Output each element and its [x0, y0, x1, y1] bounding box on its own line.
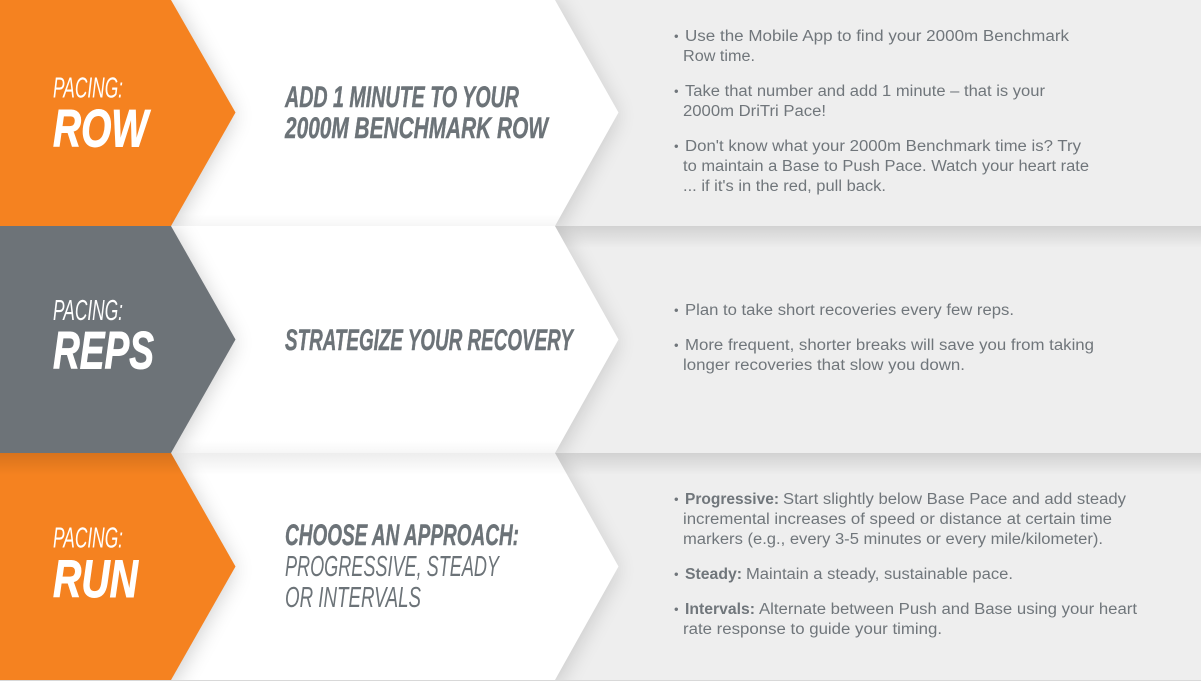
label: pacing run: PACING: [53, 522, 123, 554]
text block: run tips: rate response to guide your timing. [683, 621, 942, 638]
text block: run tips: incremental increases of speed or distance at certain time [683, 511, 1112, 528]
orange chevron [0, 453, 236, 680]
heading: choose an approach: PROGRESSIVE, STEADY [285, 551, 501, 583]
label: pacing reps: PACING: [53, 295, 123, 327]
bottom edge [0, 680, 1201, 681]
label: pacing run: RUN [53, 550, 139, 609]
white chevron [171, 0, 618, 226]
white chevron shadow [555, 453, 622, 680]
text block: row tips [674, 28, 1089, 195]
orange chevron shadow [171, 453, 240, 680]
heading: choose an approach [286, 524, 518, 608]
text block: run tips: Intervals: [685, 601, 755, 618]
text block: reps tips: More frequent, shorter breaks will save you from taking [685, 337, 1094, 354]
heading: add 1 minute: 2000M BENCHMARK ROW [284, 112, 550, 145]
text block: row tips: • [674, 138, 679, 154]
label: pacing row: ROW [53, 100, 151, 158]
text block: run tips: Maintain a steady, sustainable pace. [746, 566, 1013, 583]
white chevron [171, 226, 618, 453]
heading: add 1 minute [284, 86, 550, 138]
text block: row tips: • [674, 28, 679, 44]
orange chevron [0, 0, 236, 226]
label: pacing row: PACING: [53, 72, 123, 104]
grey chevron shadow [171, 226, 240, 453]
label: pacing reps: REPS [53, 322, 154, 380]
top shadow on white [171, 453, 561, 464]
text block: row tips: Use the Mobile App to find your 2000m Benchmark [685, 28, 1069, 45]
text block: row tips: Don't know what your 2000m Benchmark time is? Try [685, 138, 1081, 155]
top shadow on orange [0, 453, 180, 468]
heading: choose an approach: CHOOSE AN APPROACH: [285, 519, 519, 552]
text block: row tips: 2000m DriTri Pace! [683, 103, 826, 120]
panel: row pacing [0, 0, 1089, 232]
top shadow on grey area [555, 453, 1201, 468]
text block: run tips: • [674, 602, 679, 616]
text block: run tips: • [674, 492, 679, 506]
bottom fade on white chevron [188, 452, 555, 453]
text block: reps tips: Plan to take short recoveries every few reps. [685, 302, 1014, 319]
text block: run tips: Progressive: [685, 491, 779, 508]
text block: reps tips: • [674, 338, 679, 352]
heading: choose an approach: OR INTERVALS [285, 582, 421, 614]
text block: row tips: Row time. [683, 48, 755, 65]
text block: run tips [674, 491, 1138, 638]
text block: reps tips: • [674, 302, 679, 318]
bottom fade on white chevron [188, 226, 555, 227]
panel: run pacing [0, 453, 1201, 681]
white chevron [171, 453, 618, 680]
grey chevron [0, 226, 236, 453]
white chevron shadow [555, 0, 622, 226]
white chevron shadow [555, 226, 622, 453]
heading: strategize: STRATEGIZE YOUR RECOVERY [285, 324, 574, 357]
text block: reps tips: longer recoveries that slow you down. [683, 357, 965, 374]
text block: run tips: Steady: [685, 566, 742, 583]
panel: reps pacing [0, 226, 1201, 459]
text block: run tips: • [674, 566, 679, 582]
label: pacing row [53, 77, 152, 148]
text block: reps tips [674, 302, 1094, 374]
label: pacing run [53, 527, 139, 598]
text block: run tips: Alternate between Push and Base using your heart [759, 601, 1138, 618]
top shadow cast by previous row on grey area [555, 226, 1201, 242]
heading: add 1 minute: ADD 1 MINUTE TO YOUR [284, 81, 519, 114]
text block: row tips: Take that number and add 1 minute – that is your [685, 83, 1045, 100]
label: pacing reps [53, 300, 154, 370]
text block: run tips: markers (e.g., every 3-5 minutes or every mile/kilometer). [683, 531, 1103, 548]
orange chevron shadow [171, 0, 240, 226]
text block: row tips: ... if it's in the red, pull back. [683, 178, 886, 195]
text block: run tips: Start slightly below Base Pace and add steady [783, 491, 1126, 508]
text block: row tips: • [674, 84, 679, 98]
text block: row tips: to maintain a Base to Push Pace. Watch your heart rate [683, 158, 1089, 175]
